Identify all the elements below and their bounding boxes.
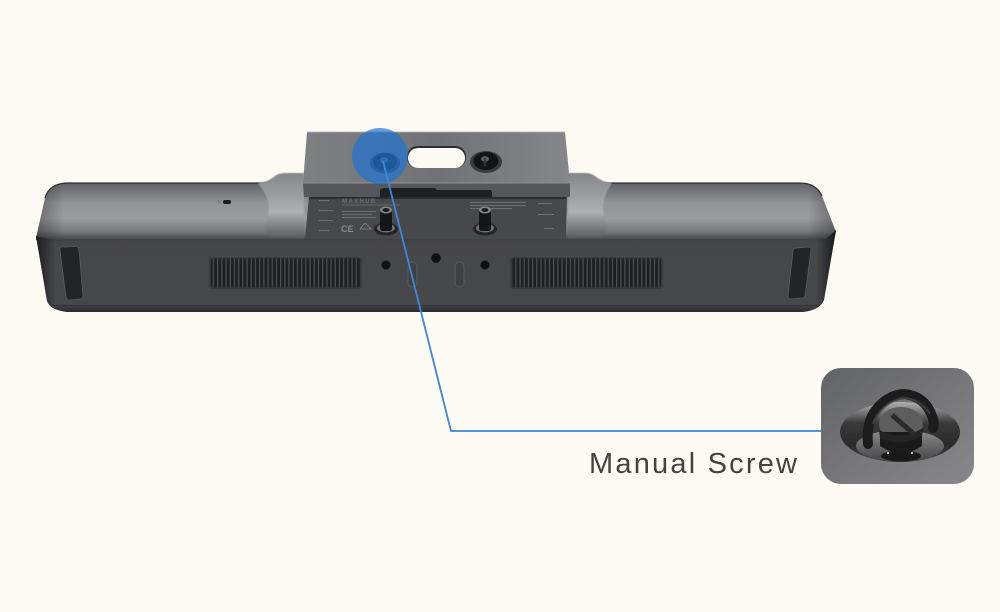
well floor bbox=[856, 430, 944, 462]
left side vent bbox=[60, 246, 83, 300]
leader line bbox=[383, 161, 822, 431]
left button slot bbox=[408, 262, 417, 287]
mounting bracket plate bbox=[303, 132, 570, 197]
left speaker grille bbox=[209, 257, 362, 289]
label: Manual Screw: Manual Screw bbox=[589, 448, 798, 480]
soundbar device bbox=[36, 132, 836, 312]
lower left hole bbox=[382, 260, 390, 270]
manual screw on bracket bbox=[370, 152, 400, 174]
blue highlight circle bbox=[352, 128, 408, 184]
screw well bbox=[840, 402, 960, 462]
right button slot bbox=[455, 262, 464, 287]
right speaker grille bbox=[510, 257, 663, 289]
soundbar front face bbox=[36, 230, 836, 312]
bracket notch bbox=[380, 188, 492, 197]
inset card: screw close-up bbox=[821, 368, 974, 484]
mounting recess with label: CE bbox=[341, 224, 354, 234]
mounting recess with label: MAXHUB bbox=[342, 199, 377, 205]
centre hole bbox=[431, 253, 441, 263]
indicator light bbox=[217, 200, 231, 204]
right side vent bbox=[788, 247, 811, 299]
left shoulder of bracket mount bbox=[258, 173, 304, 238]
lower right hole bbox=[480, 260, 490, 270]
bracket screw bbox=[470, 151, 502, 173]
right shoulder of bracket mount bbox=[568, 173, 612, 238]
left standoff post bbox=[374, 206, 398, 236]
mounting recess with label bbox=[305, 196, 567, 239]
bracket slot bbox=[407, 146, 466, 168]
folding thumb ring bbox=[868, 394, 934, 444]
soundbar top surface bbox=[36, 183, 836, 240]
right standoff post bbox=[473, 206, 497, 236]
screw head bbox=[879, 407, 923, 454]
